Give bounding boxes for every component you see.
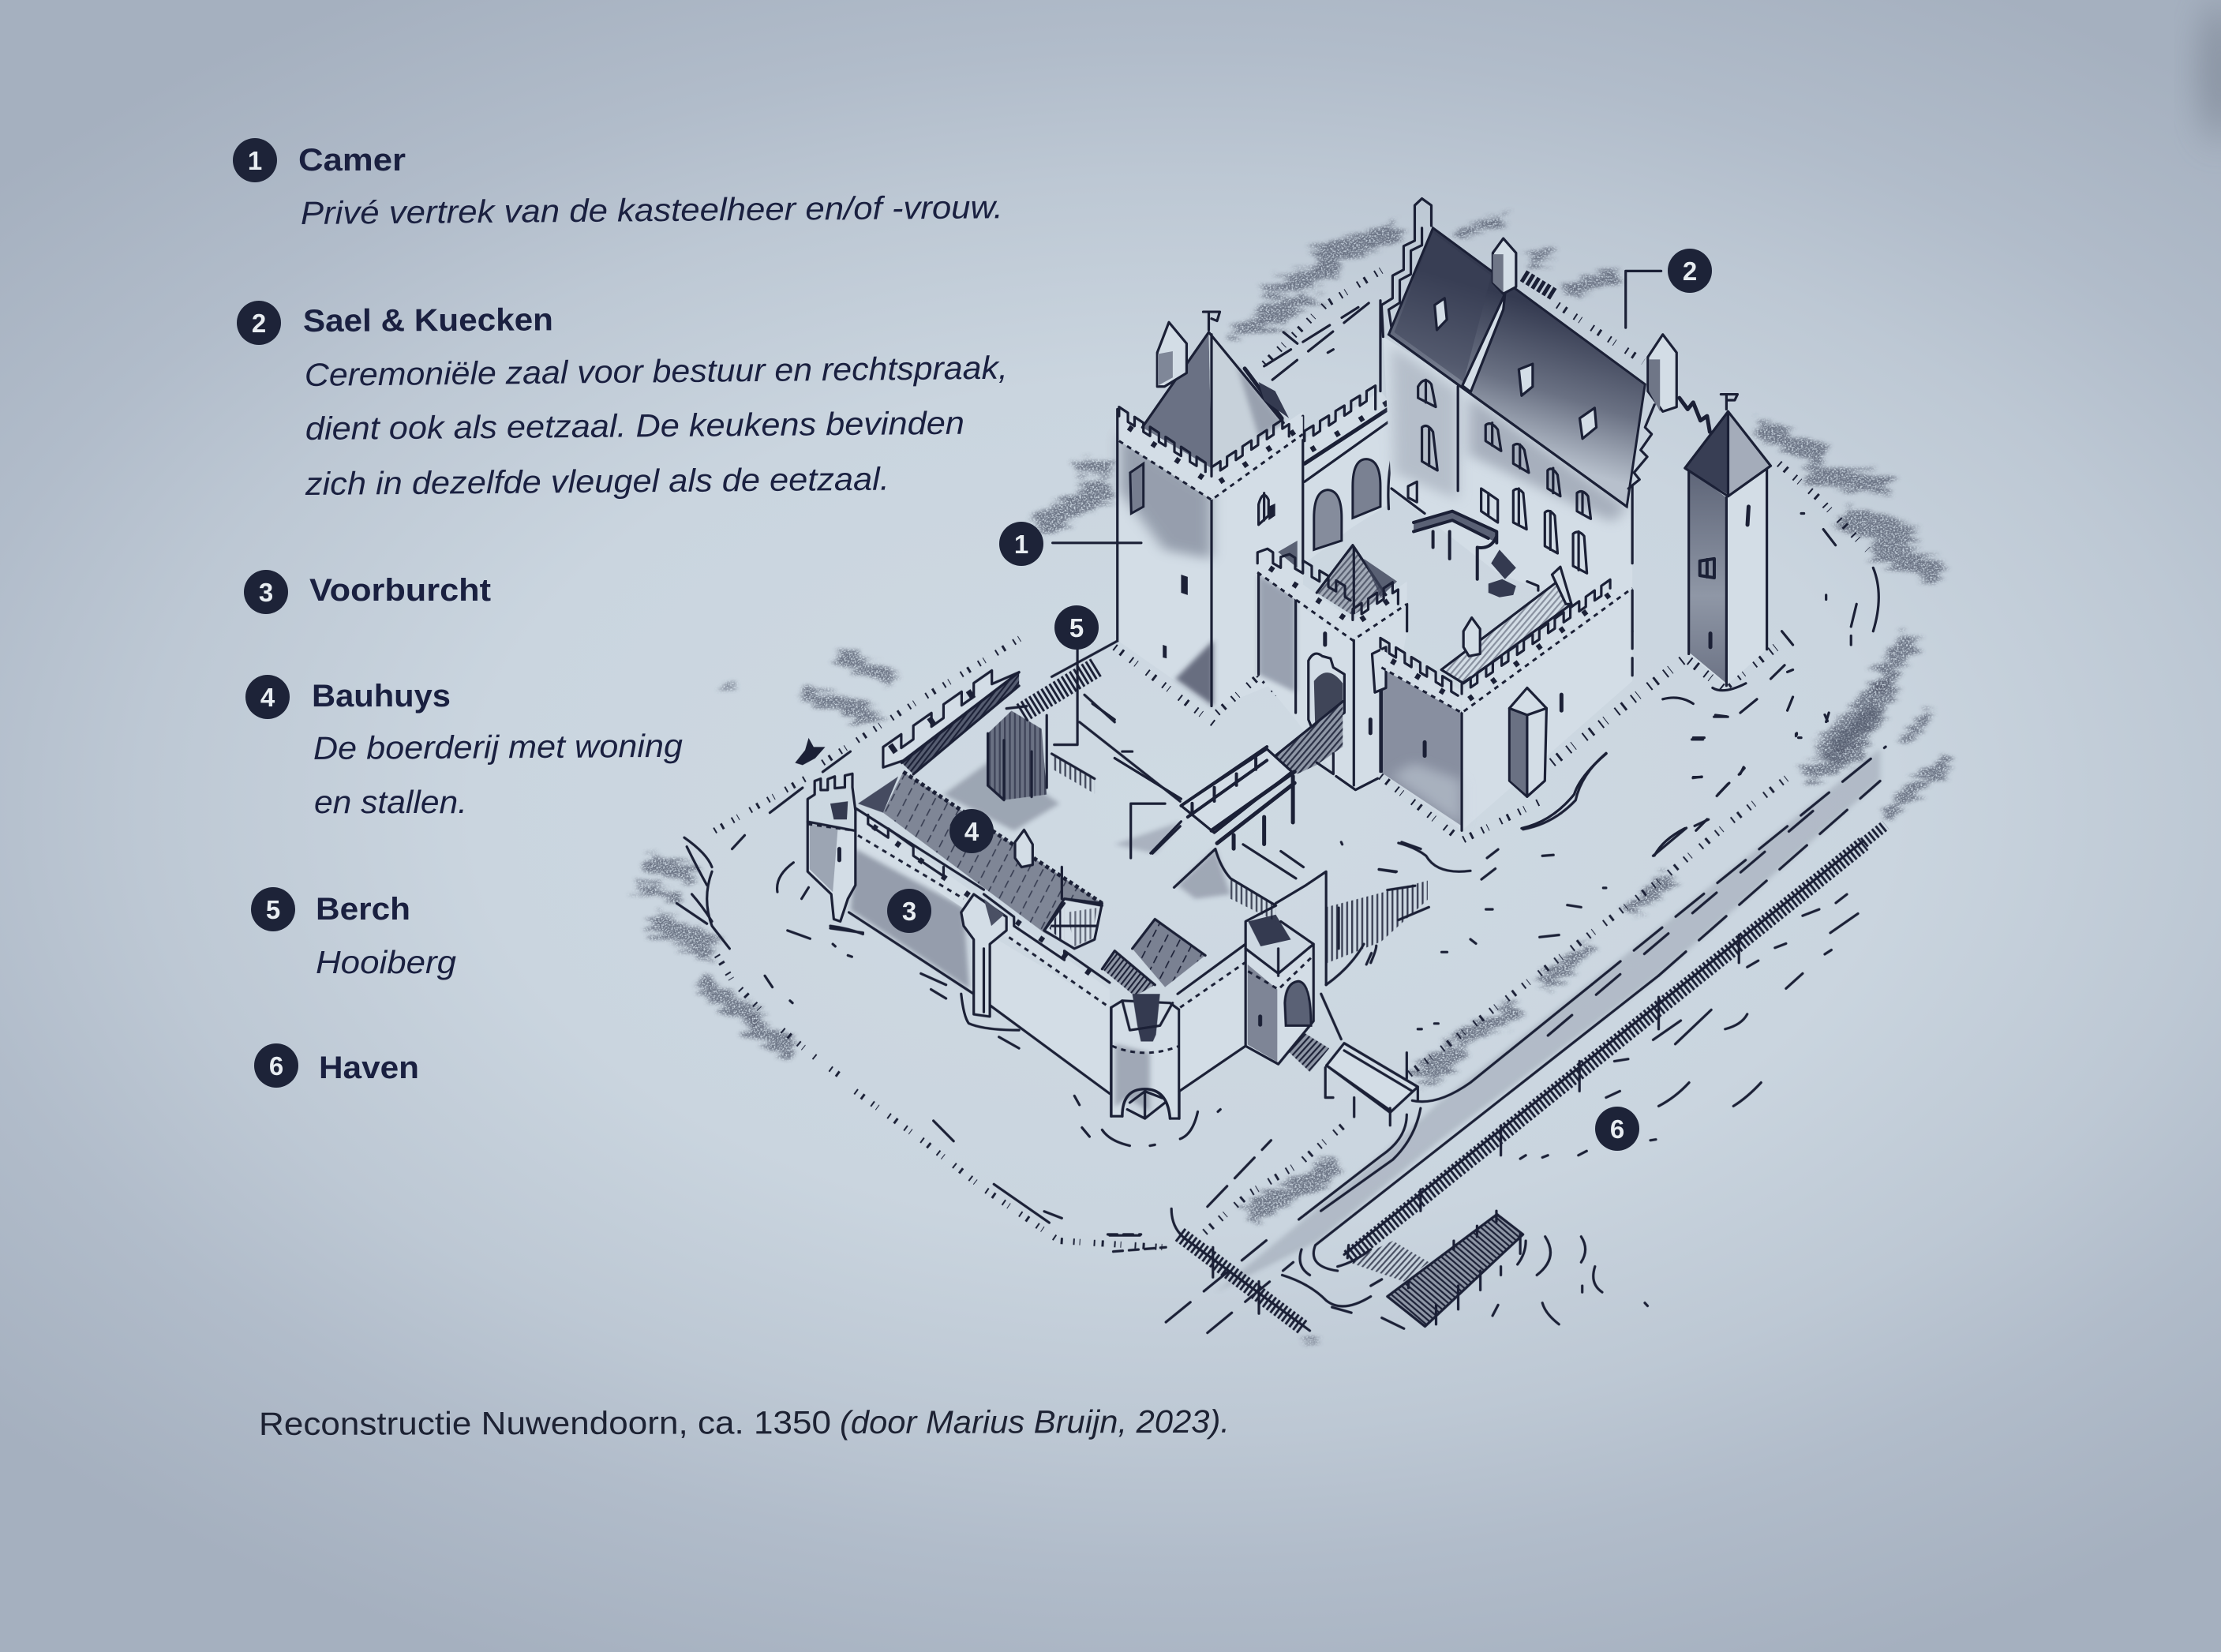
grass bank xyxy=(1410,770,1797,1074)
legend item 2: Sael & Kuecken: Sael & Kuecken xyxy=(303,302,553,339)
gatehouse roof xyxy=(1278,541,1397,616)
keep tower xyxy=(1114,312,1303,724)
marker 3: 3 xyxy=(902,897,916,926)
keep chimney xyxy=(1157,322,1186,387)
unlabelled bracket xyxy=(1131,804,1165,858)
bauhuys long roof (4) xyxy=(858,772,1102,949)
legend item 3: Voorburcht xyxy=(244,570,491,614)
inner road edges and palisade xyxy=(1114,822,1428,1040)
barrack fence xyxy=(1052,754,1095,793)
legend item 2: Sael & Kuecken: dient ook als eetzaal. De keukens bevinden xyxy=(305,405,964,447)
legend item 4: Bauhuys: Bauhuys xyxy=(312,679,451,714)
keep windows xyxy=(1130,463,1275,658)
south wing roof xyxy=(1441,567,1571,684)
legend item 1: Camer xyxy=(233,138,1003,231)
legend item 4: Bauhuys: De boerderij met woning xyxy=(313,728,683,766)
marker 4: 4 xyxy=(964,817,979,846)
smudges on the bank xyxy=(636,654,893,1053)
caption: (door Marius Bruijn, 2023). xyxy=(840,1403,1230,1440)
gate with ramp xyxy=(1270,634,1370,774)
stair gallery and well xyxy=(1414,511,1538,597)
leader line 5 xyxy=(1054,650,1077,745)
hall windows xyxy=(1408,380,1591,573)
latrine buttress xyxy=(1509,687,1546,796)
marker 2 xyxy=(1668,249,1712,293)
legend item 2: Sael & Kuecken xyxy=(237,301,1008,502)
hall facade xyxy=(1380,301,1632,627)
road, harbour and moat xyxy=(1108,710,1952,1343)
short fence xyxy=(1171,1208,1310,1331)
hill outline xyxy=(676,636,1220,1248)
legend item 6: Haven: 6 xyxy=(269,1051,283,1081)
gatehouse xyxy=(1257,541,1407,790)
caption: Reconstructie Nuwendoorn, ca. 1350 xyxy=(259,1404,831,1442)
hill line xyxy=(1264,264,1878,738)
legend item 5: Berch: 5 xyxy=(266,895,280,924)
dark corner shading xyxy=(2202,0,2221,142)
road edges xyxy=(1166,747,1886,1333)
lower bridge xyxy=(1285,1023,1418,1126)
forecourt wall left section xyxy=(849,808,1110,1093)
keep roof xyxy=(1142,332,1283,468)
right forecourt wall and gate tower xyxy=(1178,871,1326,1092)
corner round tower with gate roof xyxy=(1102,919,1205,1118)
hall roof xyxy=(1381,199,1710,507)
legend item 6: Haven: Haven xyxy=(319,1051,419,1085)
harbour jetty xyxy=(1349,1211,1523,1326)
leader line 2 xyxy=(1626,271,1661,328)
legend item 6: Haven xyxy=(254,1043,419,1088)
marker 3 xyxy=(887,889,931,933)
outer ward xyxy=(636,631,1428,1248)
legend item 5: Berch: Hooiberg xyxy=(316,944,456,980)
caption xyxy=(259,1403,1230,1442)
legend item 1: Camer: Privé vertrek van de kasteelheer en/of -vrouw. xyxy=(301,189,1003,231)
legend item 3: Voorburcht: Voorburcht xyxy=(309,573,491,608)
ground marks xyxy=(1522,631,1829,856)
legend item 5: Berch: Berch xyxy=(316,892,410,927)
legend item 5: Berch xyxy=(251,887,456,980)
legend item 1: Camer: Camer xyxy=(298,143,406,178)
upper bridge xyxy=(1092,704,1294,853)
marker 4 xyxy=(949,809,994,853)
illustration: castle Nuwendoorn xyxy=(636,199,1952,1343)
marker 1 xyxy=(999,522,1043,566)
legend item 4: Bauhuys: en stallen. xyxy=(314,784,467,820)
marker 5 xyxy=(1054,605,1099,650)
marker 2: 2 xyxy=(1683,257,1697,286)
curtain wall with arches xyxy=(1305,386,1400,564)
legend xyxy=(233,138,1008,1088)
left round tower xyxy=(807,774,863,934)
keep flag xyxy=(1203,312,1220,330)
legend item 3: Voorburcht: 3 xyxy=(259,578,273,607)
legend item 1: Camer: 1 xyxy=(248,146,262,175)
ripples and water marks xyxy=(1108,714,1858,1328)
legend item 4: Bauhuys xyxy=(245,675,683,820)
palisade behind barrack xyxy=(1021,667,1097,713)
leader line 1 xyxy=(1053,541,1141,544)
back wall with walkway xyxy=(883,670,1019,774)
marker 1: 1 xyxy=(1014,530,1028,559)
long fence xyxy=(1344,825,1886,1258)
horse rider on the bank xyxy=(795,738,826,765)
hay barrack (5) xyxy=(943,706,1059,831)
marker 5: 5 xyxy=(1069,613,1084,642)
legend item 2: Sael & Kuecken: zich in dezelfde vleugel als de eetzaal. xyxy=(305,461,890,502)
round corner tower right xyxy=(1685,395,1771,691)
road surface xyxy=(1215,749,1880,1292)
legend item 2: Sael & Kuecken: Ceremoniële zaal voor bestuur en rechtspraak, xyxy=(305,350,1008,393)
legend item 2: Sael & Kuecken: 2 xyxy=(252,309,266,338)
south wing walls xyxy=(1372,568,1779,840)
mid buttress xyxy=(961,894,1006,1017)
legend item 4: Bauhuys: 4 xyxy=(260,683,275,712)
number markers on illustration xyxy=(887,249,1712,1151)
main castle xyxy=(1037,199,1939,856)
marker 6: 6 xyxy=(1610,1114,1624,1144)
gatehouse battlements xyxy=(1257,549,1407,640)
smudges behind the castle xyxy=(1037,219,1939,754)
marker 6 xyxy=(1595,1107,1639,1151)
forecourt ground lines xyxy=(1052,631,1421,965)
keep battlements xyxy=(1119,382,1303,500)
smudges along the bank xyxy=(1249,710,1952,1343)
